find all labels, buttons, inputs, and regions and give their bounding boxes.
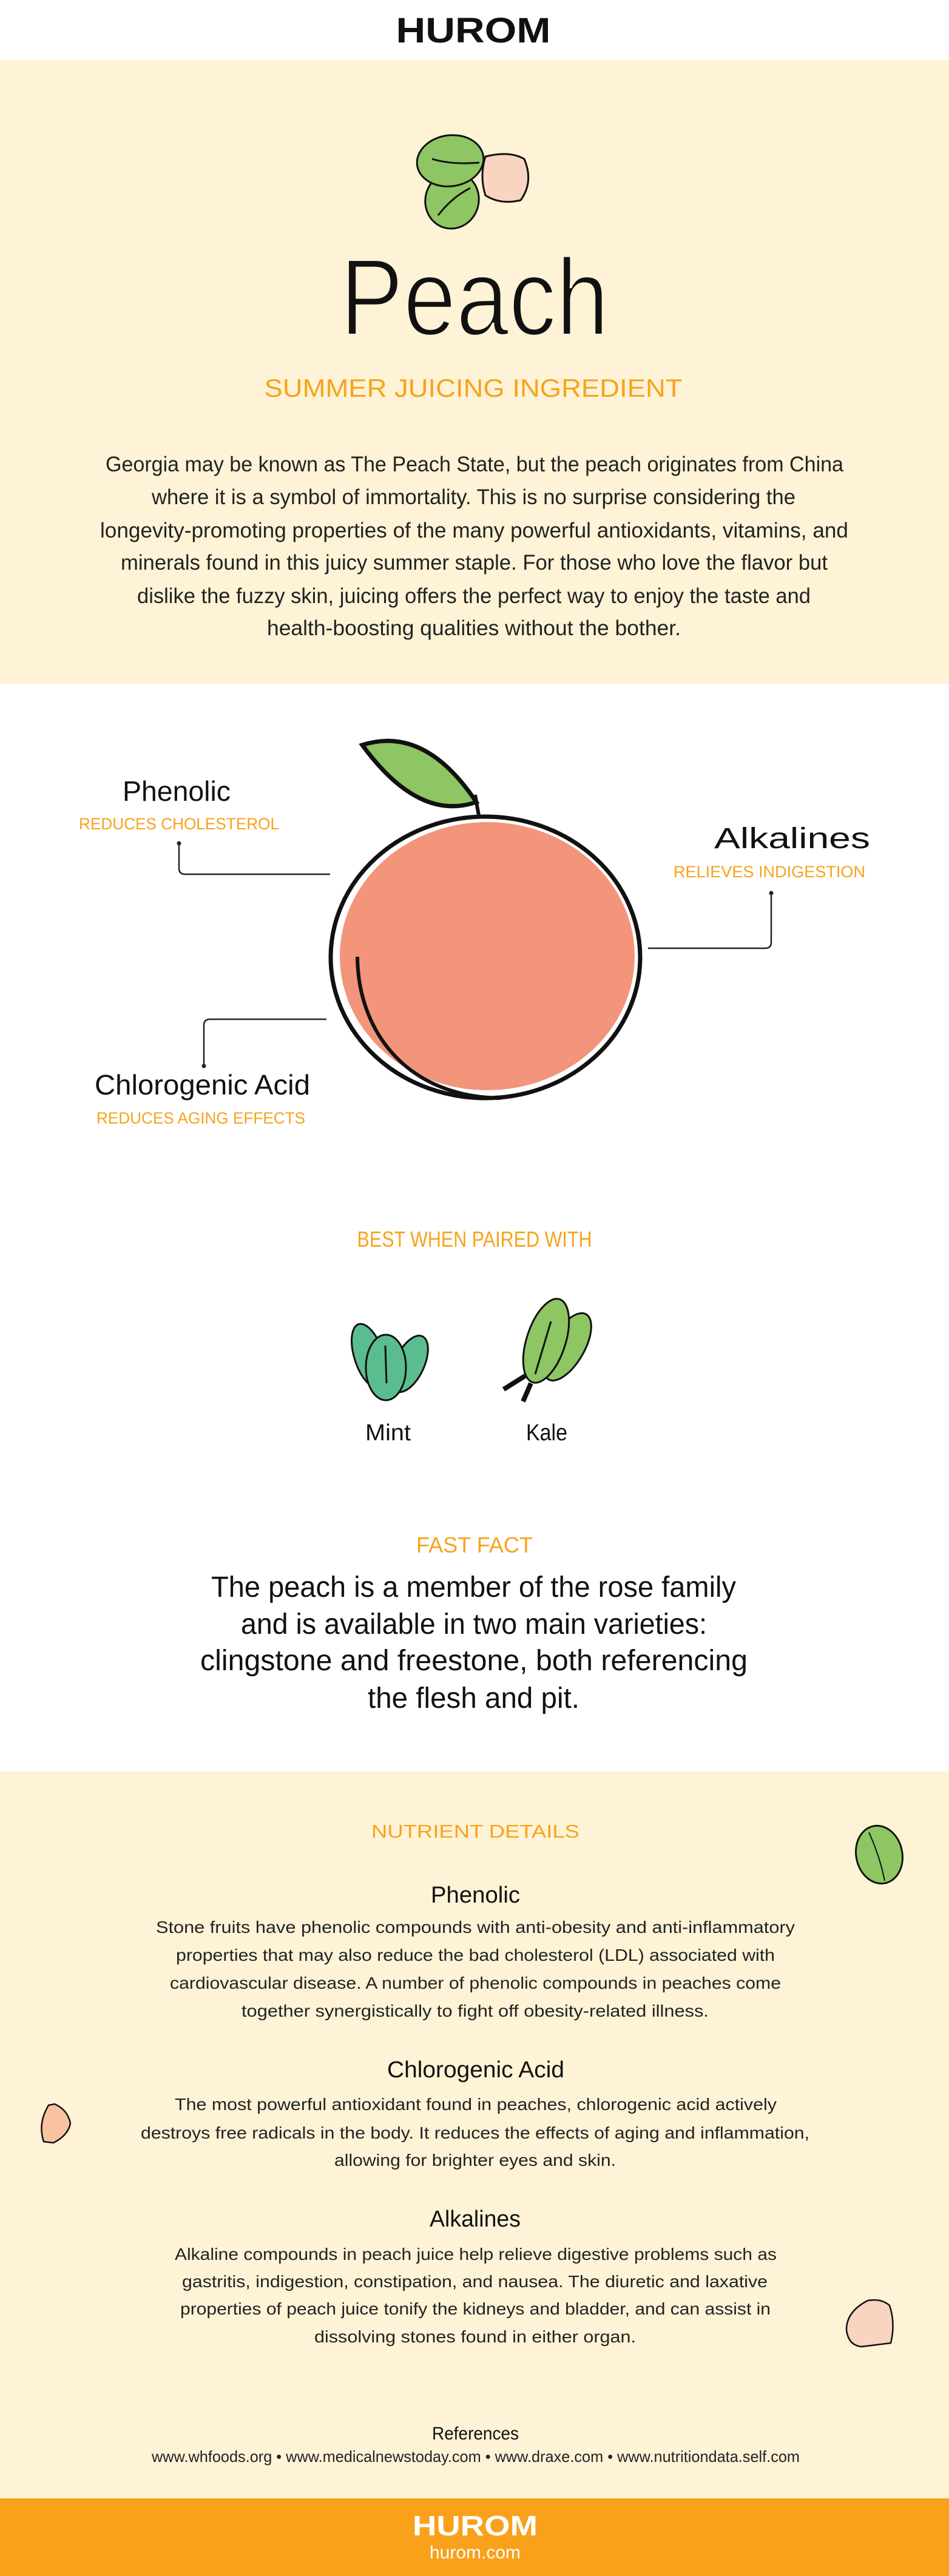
text block: phenolic [156, 1883, 795, 2020]
label: chlorogenic acid: Chlorogenic Acid [95, 1069, 310, 1101]
panel: fast fact: and is available in two main varieties: [241, 1608, 707, 1640]
references: www.whfoods.org • www.medicalnewstoday.com • www.draxe.com • www.nutritiondata.self.com [151, 2447, 800, 2466]
heading: nutrient details: NUTRIENT DETAILS [371, 1821, 579, 1842]
panel: fast fact [200, 1532, 748, 1715]
text block: chlorogenic acid: allowing for brighter eyes and skin. [334, 2151, 616, 2170]
text block: chlorogenic acid [141, 2057, 809, 2170]
panel: fast fact: The peach is a member of the rose family [211, 1571, 736, 1603]
text block: alkalines: Alkaline compounds in peach juice help relieve digestive problems such as [175, 2245, 777, 2264]
intro paragraph: health-boosting qualities without the bother. [267, 616, 681, 640]
text block: alkalines: properties of peach juice tonify the kidneys and bladder, and can assist in [180, 2299, 771, 2318]
references [151, 2424, 800, 2466]
label: mint: Mint [365, 1420, 411, 1446]
label: alkalines [648, 823, 870, 948]
text block: alkalines: Alkalines [430, 2207, 521, 2232]
icon: mint [345, 1320, 436, 1400]
label: phenolic: Phenolic [123, 775, 231, 807]
panel: intro [0, 60, 949, 684]
text block: alkalines: gastritis, indigestion, constipation, and nausea. The diuretic and laxative [182, 2272, 768, 2291]
panel: best when paired with [345, 1227, 601, 1446]
panel: fast fact: the flesh and pit. [368, 1682, 579, 1715]
footer [0, 2498, 949, 2576]
icon: leaves and peach [414, 131, 529, 235]
intro paragraph [100, 453, 848, 640]
text block: phenolic: properties that may also reduce the bad cholesterol (LDL) associated with [176, 1946, 775, 1964]
text block: chlorogenic acid: The most powerful antioxidant found in peaches, chlorogenic acid actively [175, 2095, 777, 2114]
text block: chlorogenic acid: destroys free radicals in the body. It reduces the effects of aging and inflammation, [141, 2123, 809, 2142]
label: kale: Kale [526, 1420, 567, 1446]
icon: peach leaf and stem [362, 741, 479, 819]
label: alkalines: Alkalines [714, 823, 870, 855]
panel: best when paired with: BEST WHEN PAIRED WITH [357, 1227, 592, 1252]
text block: phenolic: Phenolic [431, 1883, 520, 1908]
icon: peach body [331, 817, 640, 1098]
references: References [432, 2424, 519, 2444]
label: phenolic: REDUCES CHOLESTEROL [79, 815, 279, 833]
text block: phenolic: Stone fruits have phenolic compounds with anti-obesity and anti-inflammatory [156, 1918, 795, 1937]
intro paragraph: longevity-promoting properties of the many powerful antioxidants, vitamins, and [100, 519, 848, 542]
title: Peach [340, 237, 609, 359]
panel: fast fact: FAST FACT [416, 1532, 533, 1557]
label: phenolic [79, 775, 330, 874]
intro paragraph: minerals found in this juicy summer staple. For those who love the flavor but [121, 551, 828, 575]
footer logo: HUROM [413, 2510, 538, 2541]
text block: chlorogenic acid: Chlorogenic Acid [387, 2057, 564, 2083]
intro paragraph: Georgia may be known as The Peach State, but the peach originates from China [106, 453, 844, 476]
intro paragraph: dislike the fuzzy skin, juicing offers the perfect way to enjoy the taste and [137, 584, 811, 608]
footer url: hurom.com [430, 2543, 521, 2563]
panel: fast fact: clingstone and freestone, both referencing [200, 1645, 748, 1677]
panel: nutrient details [0, 1772, 949, 2498]
peach diagram [79, 741, 870, 1127]
icon: kale [504, 1293, 601, 1401]
text block: alkalines: dissolving stones found in either organ. [314, 2327, 636, 2346]
text block: phenolic: together synergistically to fight off obesity-related illness. [241, 2001, 709, 2020]
icon: small peach left [41, 2104, 70, 2143]
subtitle: SUMMER JUICING INGREDIENT [265, 374, 682, 402]
icon: decorative leaf [851, 1821, 908, 1888]
label: alkalines: RELIEVES INDIGESTION [674, 863, 865, 881]
label: chlorogenic acid [95, 1019, 326, 1127]
label: chlorogenic acid: REDUCES AGING EFFECTS [96, 1109, 305, 1127]
icon: small peach right [846, 2300, 893, 2347]
text block: alkalines [175, 2207, 777, 2346]
header logo: HUROM [396, 11, 551, 50]
intro paragraph: where it is a symbol of immortality. This is no surprise considering the [151, 485, 795, 509]
text block: phenolic: cardiovascular disease. A number of phenolic compounds in peaches come [170, 1974, 781, 1992]
